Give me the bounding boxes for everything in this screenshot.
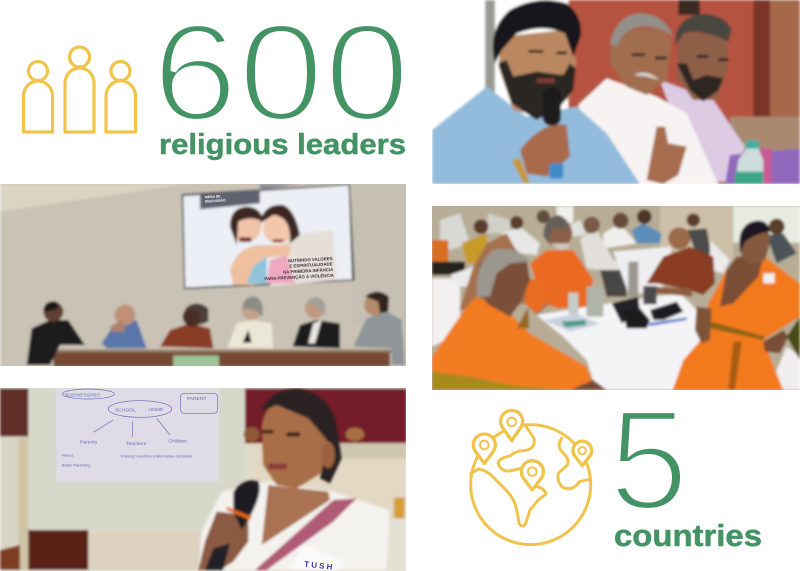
photo: woman speaking into a microphone xyxy=(0,385,407,571)
flip chart diagram xyxy=(62,389,217,437)
back monk, orange shirt xyxy=(530,215,593,308)
screen text: DISCUSSÃO xyxy=(205,197,226,204)
label: countries: countries xyxy=(614,518,762,553)
screen caption: NA PRIMEIRA INFÂNCIA xyxy=(283,267,334,275)
icon: globe with location pins xyxy=(471,410,592,545)
screen text xyxy=(205,195,226,203)
table xyxy=(43,350,401,367)
flip chart notes: HOME xyxy=(148,407,164,413)
shirtless man behind xyxy=(459,233,550,315)
screen caption xyxy=(264,256,335,281)
man in lilac shirt xyxy=(660,14,745,182)
flip chart notes: BUSINESS/ISO xyxy=(65,393,100,399)
bottle and purple cloth xyxy=(725,141,800,184)
screen text: MESA DE xyxy=(205,194,221,199)
flip chart notes: Values xyxy=(62,453,74,458)
icon: three people xyxy=(24,47,136,132)
flip chart notes xyxy=(62,393,207,468)
flip chart notes: PARENT xyxy=(187,396,207,402)
label: religious leaders: religious leaders xyxy=(159,129,406,161)
panelist 1 xyxy=(27,301,85,365)
background attendees xyxy=(432,209,797,297)
photo: monks in orange robes at round tables xyxy=(430,200,800,393)
flip chart notes: Teachers xyxy=(126,441,147,447)
woman speaking xyxy=(198,389,389,570)
panelist 6 xyxy=(353,292,405,365)
photo: panel discussion under a screen xyxy=(0,180,410,370)
heading: 600: 600 xyxy=(152,0,410,150)
panelist 4 xyxy=(228,297,273,348)
flip chart notes: Children xyxy=(168,438,187,444)
flip chart notes: Training Investment Alternative discipline xyxy=(120,454,193,459)
flip chart notes: SCHOOL xyxy=(115,408,136,414)
screen caption: NUTRINDO VALORES xyxy=(288,256,333,263)
man in turban, blue shirt xyxy=(432,0,640,184)
flip chart notes: Parents xyxy=(80,439,98,445)
front monk in orange robe xyxy=(432,248,607,390)
panelist 5 xyxy=(293,297,340,348)
photo: speaker in turban with microphone xyxy=(430,0,800,184)
man in white shirt xyxy=(578,13,718,184)
screen caption: PARA PREVENÇÃO À VIOLÊNCIA xyxy=(264,273,335,281)
continent outlines xyxy=(471,469,546,526)
children on screen xyxy=(230,205,300,285)
flip chart notes: Better Parenting xyxy=(62,463,90,468)
panelist 3 xyxy=(160,303,213,348)
panelist 2 xyxy=(102,305,147,348)
screen caption: E ESPIRITUALIDADE xyxy=(289,261,333,269)
woman in orange robe xyxy=(673,221,800,390)
monk in rust robe xyxy=(647,227,715,297)
table items xyxy=(543,262,687,332)
location pins xyxy=(473,410,592,490)
heading: 5: 5 xyxy=(609,381,689,540)
white tablecloths and chair xyxy=(432,247,800,390)
